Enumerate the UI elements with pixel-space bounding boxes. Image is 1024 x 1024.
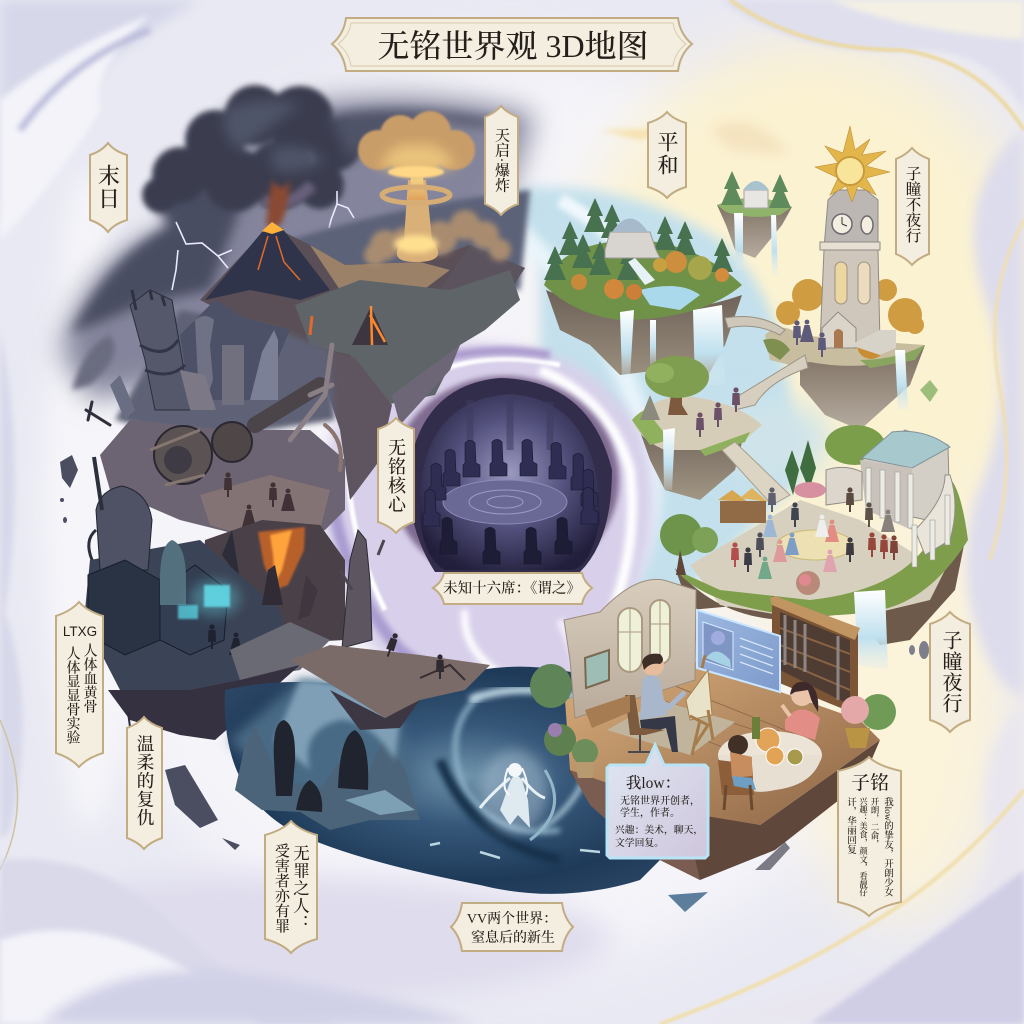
label: LTXG: LTXG: [63, 624, 97, 639]
right cracked plateau: [295, 270, 520, 405]
label: LTXG: 人体血黄骨: [82, 643, 98, 714]
boy on chair: [718, 735, 756, 810]
central vortex: [320, 343, 653, 702]
study room island: [530, 579, 896, 880]
label: 无罪之人: 受害者亦有罪: [273, 843, 290, 933]
scavenger figures: [224, 472, 295, 527]
festival island: [660, 425, 968, 670]
title banner: 无铭世界观 3D地图: [377, 28, 649, 64]
easel and canvas: [686, 655, 713, 755]
observatory: [605, 232, 660, 258]
label: 末日: [90, 143, 127, 232]
market tents: [718, 488, 768, 523]
laboratory machinery: [84, 457, 330, 752]
broken beams: [86, 345, 341, 470]
ruined mountain range: [200, 225, 525, 380]
label: 子瞳夜行: 子瞳夜行: [939, 630, 962, 714]
label: 温柔的复仇: 温柔的复仇: [135, 735, 155, 827]
back wall with windows: [564, 579, 696, 718]
label: 平和: [648, 112, 686, 198]
label: 未知十六席: [433, 573, 592, 604]
lava gully: [200, 520, 345, 645]
sun clock: [815, 126, 890, 202]
label: 子铭: 讦，华丽回复: [845, 797, 857, 855]
title banner: [332, 18, 692, 71]
clock tower island: [725, 126, 925, 430]
label: 天启·爆炸: [485, 106, 518, 215]
wreck plateau: [86, 345, 345, 540]
grove island: [632, 356, 790, 505]
dead tree and rubble: [262, 530, 490, 730]
callout: 我low: 兴趣：美术，聊天，: [615, 823, 703, 836]
dancers and crowd: [731, 487, 898, 579]
callout: 我low: [607, 745, 708, 858]
leaning tower: [130, 290, 190, 410]
label: 子铭: [838, 757, 901, 916]
label: VV两个世界: VV两个世界：: [467, 910, 557, 927]
tower body: [820, 190, 896, 355]
flower pots: [530, 664, 896, 778]
label: 平和: 平和: [655, 131, 679, 177]
label: 未知十六席: 未知十六席：《谓之》: [443, 579, 581, 597]
label: 子瞳不夜行: [896, 148, 929, 265]
debris rocks: [60, 380, 938, 912]
label: 子铭: 我low的挚友，开朗少女: [882, 796, 894, 898]
label: 天启·爆炸: 天启·爆炸: [493, 128, 510, 193]
domed hall: [826, 430, 955, 567]
label: 子铭: 子铭: [851, 772, 889, 794]
volcanic smoke plume: [142, 85, 361, 213]
mountains and mushroom cloud: [200, 111, 530, 500]
holographic screen: [697, 610, 780, 692]
autumn trees: [776, 279, 924, 359]
forest island with observatory: [544, 198, 742, 390]
label: 无罪之人: 无罪之人：: [290, 844, 310, 932]
waterfalls: [620, 310, 634, 378]
small floating temple island: [717, 171, 792, 275]
callout: 我low: 学生，作者。: [620, 806, 680, 819]
rock underside: [568, 740, 880, 880]
volcano: [205, 180, 330, 300]
artist at work: [625, 654, 685, 752]
girl: [782, 682, 820, 740]
ruined city: [110, 290, 335, 440]
pines: [544, 198, 733, 280]
sky water sphere on the right side: [505, 187, 830, 600]
sphere wreck: [150, 422, 252, 485]
stone bridges: [725, 316, 785, 335]
rubble platform: [290, 645, 490, 718]
label: 无罪之人: [265, 821, 317, 953]
ghost girl: [480, 750, 548, 834]
label: VV两个世界: [451, 903, 573, 951]
machine blocks: [88, 560, 160, 655]
bookshelf: [770, 596, 860, 715]
storm clouds and smoke: [60, 85, 535, 400]
label: VV两个世界: 窒息后的新生: [471, 929, 555, 946]
callout: 我low: 我low：: [626, 774, 680, 792]
lab figures: [208, 624, 243, 655]
label: 子铭: 开朗，二俞，: [870, 797, 880, 848]
wooden floor: [565, 660, 880, 825]
desk: [585, 695, 630, 728]
label: 无铭核心: 无铭核心: [386, 438, 406, 514]
callout: 我low: 无铭世界开创者，: [620, 794, 700, 807]
abyss water vortex: [225, 667, 690, 894]
label: LTXG: 人体显显骨实验: [64, 646, 80, 744]
council chamber: [391, 376, 619, 584]
label: 子铭: 兴趣：美食，颜文，看靓仔: [858, 797, 868, 897]
label: 末日: 末日: [96, 164, 120, 210]
cypress trees: [785, 440, 816, 495]
icon: lightning bolts: [172, 191, 354, 290]
label: 温柔的复仇: [127, 717, 162, 849]
label: 子瞳不夜行: 子瞳不夜行: [904, 165, 921, 243]
mushroom cloud: [358, 111, 511, 266]
label: 无铭核心: [378, 418, 414, 533]
sixteen seats: [423, 440, 598, 564]
label: LTXG: [56, 602, 103, 767]
table with food: [718, 717, 822, 792]
ice rocks and mourners: [235, 680, 420, 830]
label: 子瞳夜行: [930, 612, 970, 732]
callout: 我low: 文学回复。: [615, 836, 664, 849]
cylinder tank: [96, 486, 152, 570]
